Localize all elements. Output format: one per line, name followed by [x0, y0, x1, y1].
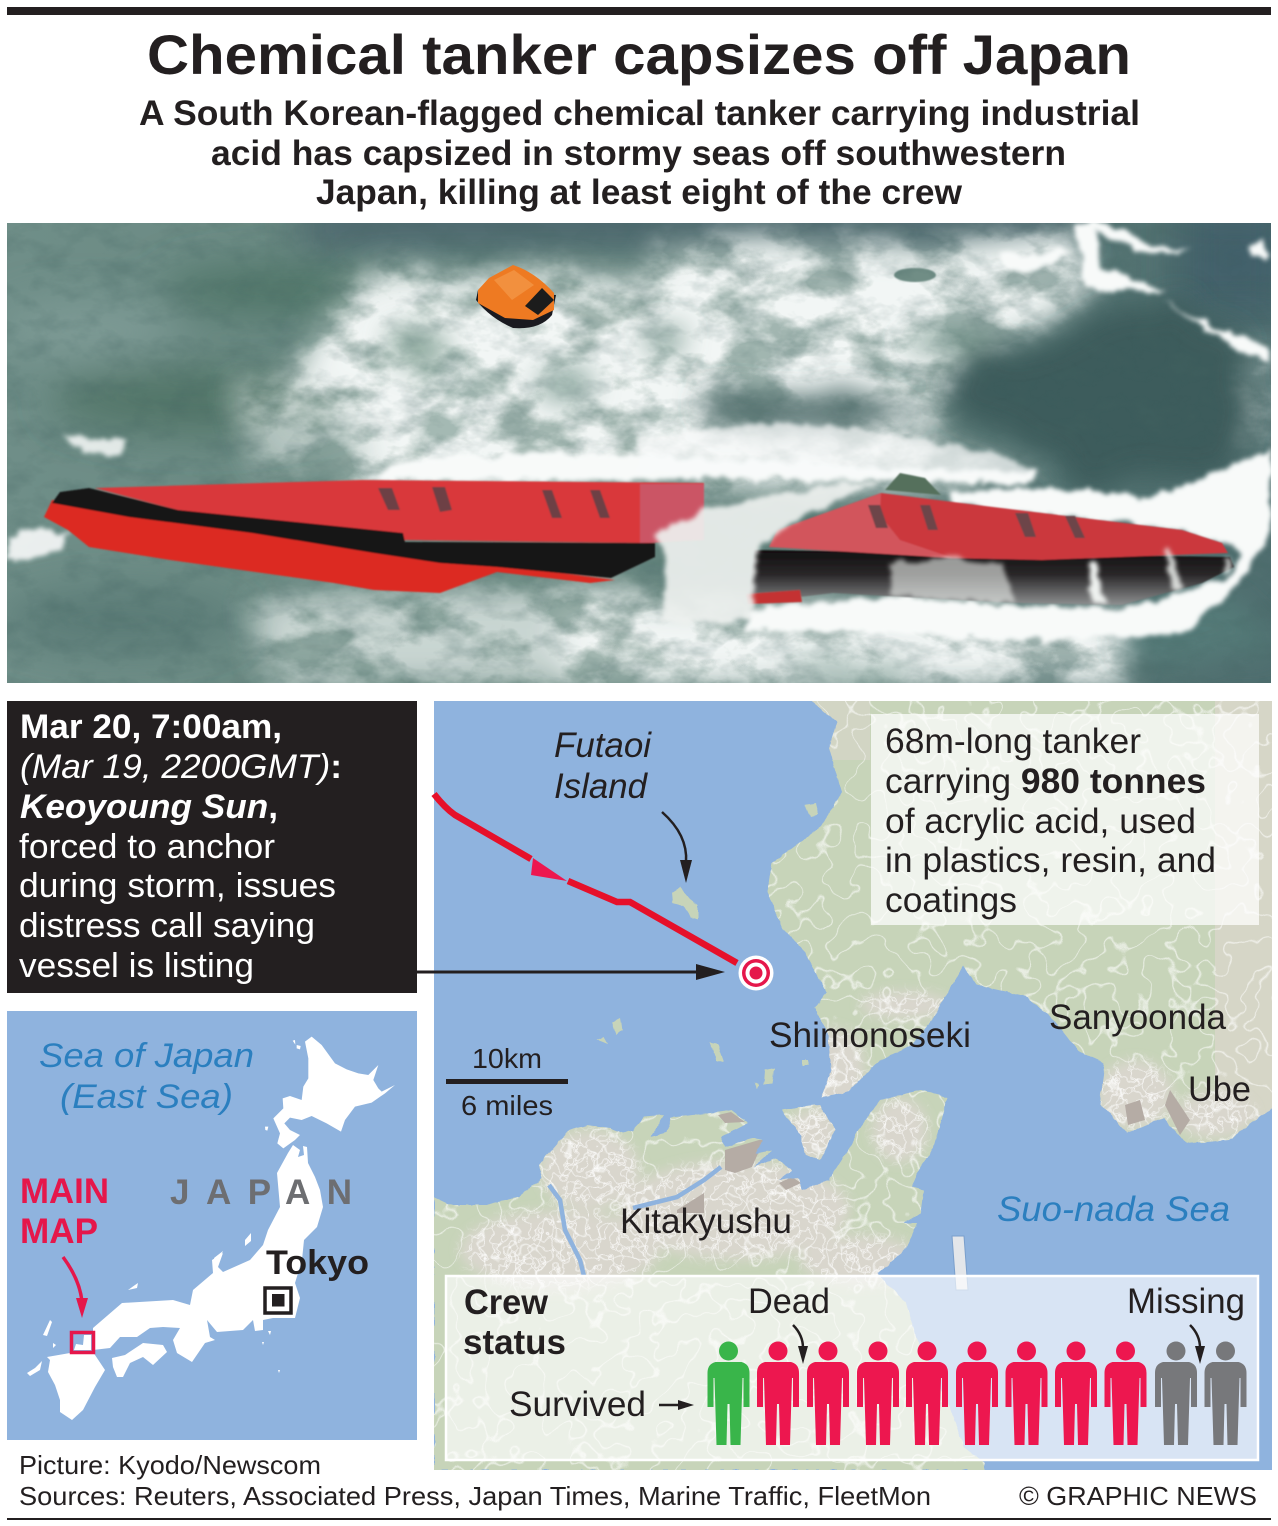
- map scale bar: 10km: [472, 1043, 542, 1074]
- credits: Picture: Kyodo/Newscom: [19, 1450, 321, 1480]
- panel text: Mar 20, 7:00am,: [20, 708, 282, 746]
- icon: survived crew member: [708, 1342, 750, 1445]
- map label: Futaoi Island: [554, 726, 652, 806]
- panel text: (Mar 19, 2200GMT) :: [20, 748, 342, 786]
- locator: Shikoku: [112, 1343, 167, 1377]
- photo: small eddy: [894, 268, 936, 282]
- callout: tanker cargo: of acrylic acid, used: [885, 802, 1196, 841]
- map: urban streets: [456, 986, 1258, 1290]
- locator: Japan landmass: [27, 1037, 395, 1420]
- arrow: Missing: [1190, 1325, 1205, 1364]
- map label: Sanyoonda: Sanyoonda: [1049, 998, 1227, 1037]
- credits: [19, 1450, 931, 1511]
- map: harbour pier: [952, 1236, 968, 1290]
- photo: sharp wave crests: [7, 223, 1271, 640]
- icons: dead crew members: [757, 1342, 1146, 1445]
- icon: Tokyo capital marker: [265, 1288, 291, 1313]
- bottom rule: [7, 1518, 1271, 1520]
- callout: tanker cargo: [871, 714, 1259, 925]
- map label: Futaoi Island: Island: [554, 767, 649, 806]
- crew heading: [463, 1283, 566, 1362]
- panel: distress call timeline box: [7, 701, 417, 993]
- panel text: distress call saying: [19, 907, 315, 945]
- map: rivers and Dokai Bay: [549, 1167, 721, 1276]
- photo: cloudy foam: [220, 223, 1271, 683]
- map: sea: [434, 701, 1272, 1470]
- photo: life raft: [476, 265, 556, 328]
- map scale bar: [446, 1043, 568, 1121]
- callout: tanker cargo: 68m-long tanker: [885, 722, 1141, 761]
- map: ship route: [434, 794, 737, 963]
- locator: Honshu: [93, 1145, 323, 1362]
- island: Futaoi: [672, 887, 698, 920]
- icons: missing crew members: [1155, 1342, 1246, 1445]
- panel text: during storm, issues: [19, 867, 336, 905]
- locator: Kyushu: [47, 1352, 105, 1420]
- arrow: to main map area: [63, 1257, 88, 1318]
- photo: hull, left section: [44, 480, 704, 593]
- label: Dead: Dead: [748, 1282, 830, 1321]
- panel text: [19, 708, 342, 985]
- panel: main map: [434, 700, 1275, 1470]
- photo: darker water bands: [0, 205, 1278, 650]
- locator label: MAIN MAP: [20, 1172, 109, 1251]
- photo: mottled texture: [7, 223, 1271, 683]
- panel background: [7, 701, 417, 993]
- top rule: [7, 7, 1271, 15]
- crew heading: Crew: [464, 1283, 549, 1322]
- map label: Shimonoseki: Shimonoseki: [769, 1016, 971, 1055]
- subtitle: [139, 94, 1140, 212]
- arrow: Survived: [659, 1400, 694, 1410]
- map label: Futaoi Island: Futaoi: [554, 726, 652, 765]
- photo: capsized tanker in rough seas: [0, 205, 1278, 683]
- map label: Ube: Ube: [1188, 1070, 1251, 1109]
- crew heading: status: [463, 1323, 566, 1362]
- locator: outlying islands: [27, 1233, 280, 1376]
- title: Chemical tanker capsizes off Japan: [147, 23, 1131, 86]
- map scale bar: 6 miles: [461, 1090, 553, 1121]
- photo: dark water pockets: [385, 295, 1265, 682]
- locator label: Sea of Japan: [39, 1037, 254, 1116]
- map: land: [434, 700, 1275, 1470]
- label: Missing: Missing: [1127, 1282, 1245, 1321]
- map: incident location marker: [738, 956, 774, 990]
- photo: sea water: [7, 223, 1271, 683]
- panel text: Keoyoung Sun,: [20, 788, 278, 826]
- locator label: MAIN MAP: MAP: [20, 1212, 98, 1251]
- photo: base foam haze: [230, 223, 1271, 683]
- map: urban tone: [460, 990, 1254, 1275]
- panel: Japan locator map: [7, 1011, 417, 1440]
- photo: water pouring over hull: [656, 480, 1233, 625]
- arrow: Dead: [793, 1325, 808, 1364]
- panel: crew status: [446, 1276, 1258, 1460]
- callout: tanker cargo: carrying 980 tonnes: [885, 762, 1206, 801]
- panel text: forced to anchor: [19, 828, 275, 866]
- map: road network: [434, 700, 1274, 1470]
- copyright: © GRAPHIC NEWS: [1019, 1481, 1257, 1511]
- map label: Kitakyushu: Kitakyushu: [620, 1202, 792, 1241]
- subtitle: acid has capsized in stormy seas off southwestern: [211, 134, 1066, 173]
- map label: Suo-nada Sea: Suo-nada Sea: [997, 1190, 1230, 1229]
- label: Survived: Survived: [509, 1385, 646, 1424]
- callout: tanker cargo: in plastics, resin, and: [885, 841, 1216, 880]
- locator: sea: [7, 1011, 417, 1440]
- photo: green wave patch above hull: [885, 473, 941, 495]
- locator label: MAIN MAP: MAIN: [20, 1172, 109, 1211]
- credits: Sources: Reuters, Associated Press, Japan Times, Marine Traffic, FleetMon: [19, 1481, 931, 1511]
- map: islands: [597, 803, 818, 1090]
- arrow: to Futaoi Island: [662, 812, 692, 883]
- map: industrial areas: [677, 1090, 1190, 1213]
- locator: main map area box: [72, 1332, 94, 1352]
- locator label: Sea of Japan: (East Sea): [60, 1078, 233, 1116]
- locator label: Tokyo: Tokyo: [266, 1244, 369, 1282]
- locator label: Sea of Japan: Sea of Japan: [39, 1037, 254, 1075]
- locator label: JAPAN: JAPAN: [170, 1173, 352, 1212]
- arrow: from timeline box to incident: [417, 964, 725, 980]
- subtitle: A South Korean-flagged chemical tanker carrying industrial: [139, 94, 1140, 133]
- crew panel background: [446, 1276, 1258, 1460]
- callout: tanker cargo: coatings: [885, 881, 1017, 920]
- subtitle: Japan, killing at least eight of the crew: [316, 173, 963, 212]
- photo: hull, right section: [746, 493, 1234, 605]
- locator: Hokkaido: [265, 1037, 395, 1148]
- panel text: vessel is listing: [19, 947, 254, 985]
